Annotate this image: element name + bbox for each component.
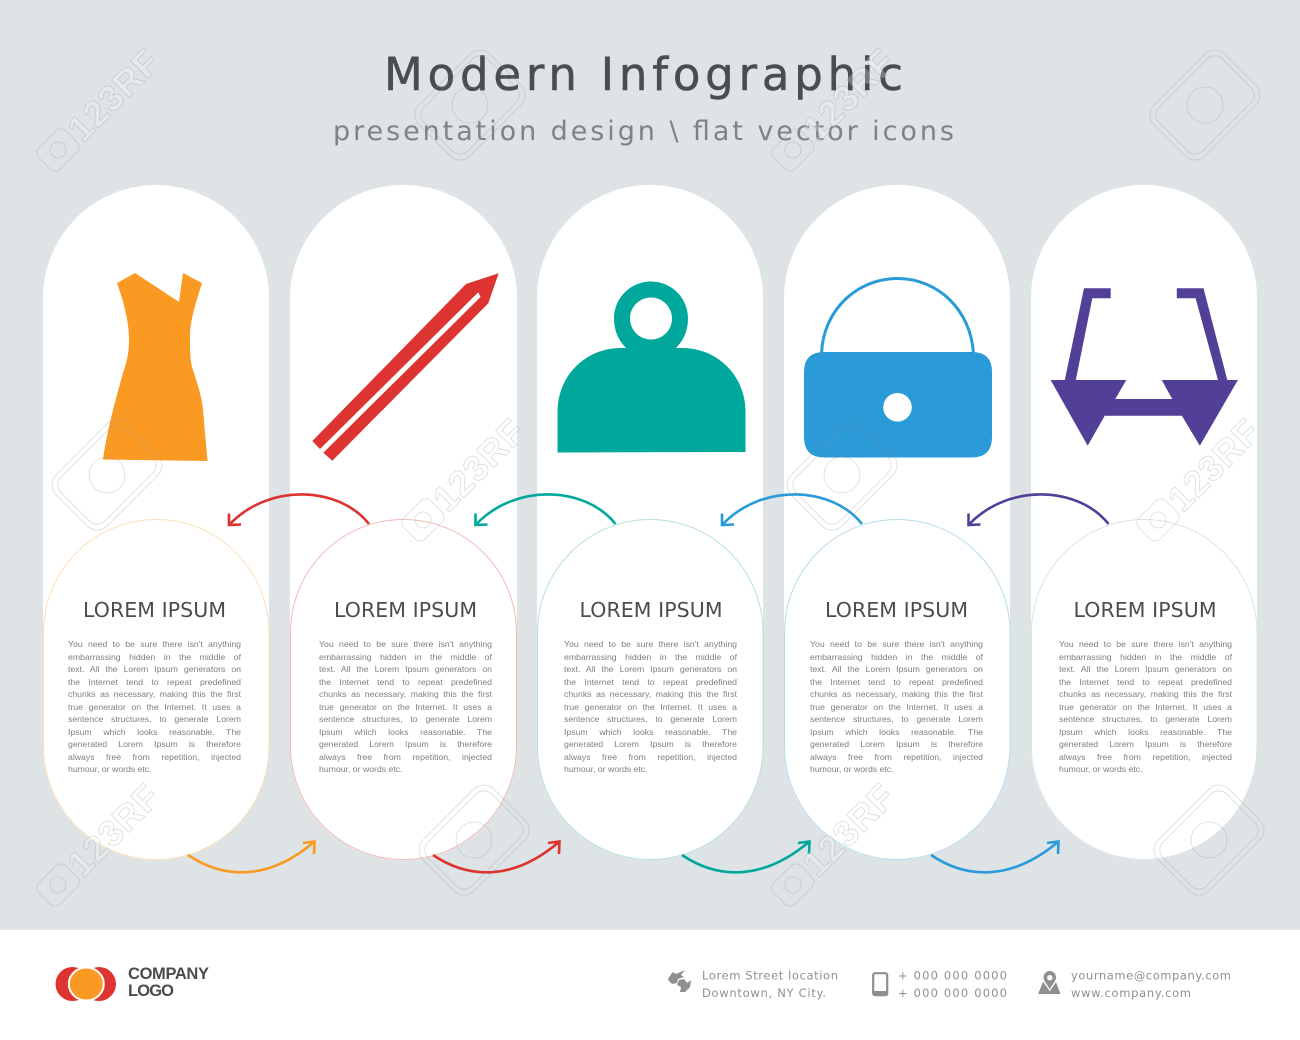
logo mark xyxy=(56,967,116,1001)
arrow: red bottom xyxy=(433,842,560,872)
icon: phone xyxy=(873,973,888,996)
icon: hijab figure xyxy=(558,282,746,452)
text block 5: the Internet tend to repeat predefined xyxy=(1059,676,1232,686)
icon: globe xyxy=(668,970,691,992)
text block 2: the Internet tend to repeat predefined xyxy=(319,676,492,686)
text block 5: Ipsum which looks reasonable. The xyxy=(1059,726,1232,736)
text block 4: chunks as necessary, making this the first xyxy=(810,689,983,699)
watermark: stock stamps xyxy=(30,41,1270,913)
address: Downtown, NY City. xyxy=(702,986,826,1000)
panel: glasses xyxy=(1031,185,1257,860)
text block 1: sentence structures, to generate Lorem xyxy=(68,714,241,724)
address xyxy=(702,968,838,1000)
text block 3: You need to be sure there isn't anything xyxy=(564,639,737,649)
email and website: www.company.com xyxy=(1071,986,1191,1000)
text block 4: sentence structures, to generate Lorem xyxy=(810,714,983,724)
text block 1: true generator on the Internet. It uses a xyxy=(68,702,241,712)
text block 5 xyxy=(1059,638,1233,778)
panel: handbag xyxy=(784,185,1010,860)
heading 1: LOREM IPSUM xyxy=(83,598,226,622)
oval: text 4 xyxy=(784,520,1010,860)
text block 2 xyxy=(319,638,493,778)
text block 5: You need to be sure there isn't anything xyxy=(1059,639,1232,649)
heading 3: LOREM IPSUM xyxy=(580,598,722,622)
heading 4: LOREM IPSUM xyxy=(825,598,968,622)
text block 4: generated Lorem Ipsum is therefore xyxy=(810,739,983,749)
text block 2: embarrassing hidden in the middle of xyxy=(319,652,492,662)
text block 4: You need to be sure there isn't anything xyxy=(810,639,983,649)
icon: dress xyxy=(103,273,208,461)
panel: pencil xyxy=(290,185,517,860)
heading 5: LOREM IPSUM xyxy=(1074,598,1216,622)
email and website xyxy=(1071,968,1231,1000)
text block 1: Ipsum which looks reasonable. The xyxy=(68,726,241,736)
icon: pencil xyxy=(312,273,499,461)
text block 2: chunks as necessary, making this the first xyxy=(319,689,492,699)
text block 1: always free from repetition, injected xyxy=(68,752,241,762)
text block 5: embarrassing hidden in the middle of xyxy=(1059,652,1232,662)
text block 3: Ipsum which looks reasonable. The xyxy=(564,726,737,736)
oval: text 5 xyxy=(1032,520,1257,860)
icon: handbag xyxy=(804,278,992,458)
text block 5: generated Lorem Ipsum is therefore xyxy=(1059,739,1232,749)
text block 3: true generator on the Internet. It uses a xyxy=(564,702,737,712)
text block 3: sentence structures, to generate Lorem xyxy=(564,714,737,724)
text block 4: embarrassing hidden in the middle of xyxy=(810,652,983,662)
arrow: orange bottom xyxy=(188,842,314,872)
text block 5: always free from repetition, injected xyxy=(1059,752,1232,762)
text block 5: humour, or words etc. xyxy=(1059,764,1143,774)
icon: glasses xyxy=(1051,288,1238,446)
arrow: purple top xyxy=(968,494,1108,525)
text block 4: the Internet tend to repeat predefined xyxy=(810,676,983,686)
logo text: LOGO xyxy=(128,982,174,1000)
text block 5: chunks as necessary, making this the first xyxy=(1059,689,1232,699)
text block 4: true generator on the Internet. It uses a xyxy=(810,702,983,712)
icon: location pin xyxy=(1038,970,1060,994)
text block 3: chunks as necessary, making this the first xyxy=(564,689,737,699)
arrow: blue top xyxy=(722,494,862,525)
text block 2: humour, or words etc. xyxy=(319,764,403,774)
logo text xyxy=(128,965,209,1000)
footer xyxy=(0,930,1300,1040)
arrow: teal bottom xyxy=(682,842,810,872)
text block 3: embarrassing hidden in the middle of xyxy=(564,652,737,662)
text block 4 xyxy=(810,638,984,778)
watermark: stock stamps: 123RF xyxy=(424,411,533,519)
watermark: stock stamps: 123RF xyxy=(794,41,903,149)
text block 2: text. All the Lorem Ipsum generators on xyxy=(319,664,492,674)
phone numbers: + 000 000 0000 xyxy=(898,986,1007,1000)
heading 2: LOREM IPSUM xyxy=(334,598,477,622)
text block 1 xyxy=(68,638,242,778)
watermark: stock stamps: 123RF xyxy=(1159,411,1268,519)
text block 2: sentence structures, to generate Lorem xyxy=(319,714,492,724)
text block 2: You need to be sure there isn't anything xyxy=(319,639,492,649)
watermark: stock stamps: 123RF xyxy=(59,776,168,884)
subtitle: presentation design \ flat vector icons xyxy=(333,116,954,147)
text block 4: Ipsum which looks reasonable. The xyxy=(810,726,983,736)
oval: text 3 xyxy=(538,520,763,860)
text block 5: sentence structures, to generate Lorem xyxy=(1059,714,1232,724)
text block 3: generated Lorem Ipsum is therefore xyxy=(564,739,737,749)
panel: dress xyxy=(43,185,269,860)
text block 3 xyxy=(564,638,738,778)
text block 1: generated Lorem Ipsum is therefore xyxy=(68,739,241,749)
text block 3: the Internet tend to repeat predefined xyxy=(564,676,737,686)
text block 1: text. All the Lorem Ipsum generators on xyxy=(68,664,241,674)
email and website: yourname@company.com xyxy=(1071,968,1231,982)
text block 1: humour, or words etc. xyxy=(68,764,152,774)
text block 3: always free from repetition, injected xyxy=(564,752,737,762)
oval: text 2 xyxy=(290,520,516,860)
phone numbers xyxy=(898,968,1007,1000)
text block 2: Ipsum which looks reasonable. The xyxy=(319,726,492,736)
oval: text 1 xyxy=(44,520,269,860)
address: Lorem Street location xyxy=(702,968,838,982)
arrow: blue bottom xyxy=(931,842,1058,872)
text block 2: true generator on the Internet. It uses a xyxy=(319,702,492,712)
text block 3: humour, or words etc. xyxy=(564,764,648,774)
text block 1: You need to be sure there isn't anything xyxy=(68,639,241,649)
text block 4: text. All the Lorem Ipsum generators on xyxy=(810,664,983,674)
phone numbers: + 000 000 0000 xyxy=(898,968,1007,982)
logo text: COMPANY xyxy=(128,965,209,983)
text block 1: embarrassing hidden in the middle of xyxy=(68,652,241,662)
text block 1: chunks as necessary, making this the first xyxy=(68,689,241,699)
watermark: stock stamps: 123RF xyxy=(794,776,903,884)
panel: hijab figure xyxy=(537,185,763,860)
arrow: red top xyxy=(229,494,369,525)
text block 4: humour, or words etc. xyxy=(810,764,894,774)
text block 5: true generator on the Internet. It uses a xyxy=(1059,702,1232,712)
text block 1: the Internet tend to repeat predefined xyxy=(68,676,241,686)
text block 2: always free from repetition, injected xyxy=(319,752,492,762)
text block 4: always free from repetition, injected xyxy=(810,752,983,762)
title: Modern Infographic xyxy=(384,48,903,101)
text block 5: text. All the Lorem Ipsum generators on xyxy=(1059,664,1232,674)
text block 3: text. All the Lorem Ipsum generators on xyxy=(564,664,737,674)
arrow: teal top xyxy=(476,494,616,525)
watermark: stock stamps: 123RF xyxy=(59,41,168,149)
text block 2: generated Lorem Ipsum is therefore xyxy=(319,739,492,749)
